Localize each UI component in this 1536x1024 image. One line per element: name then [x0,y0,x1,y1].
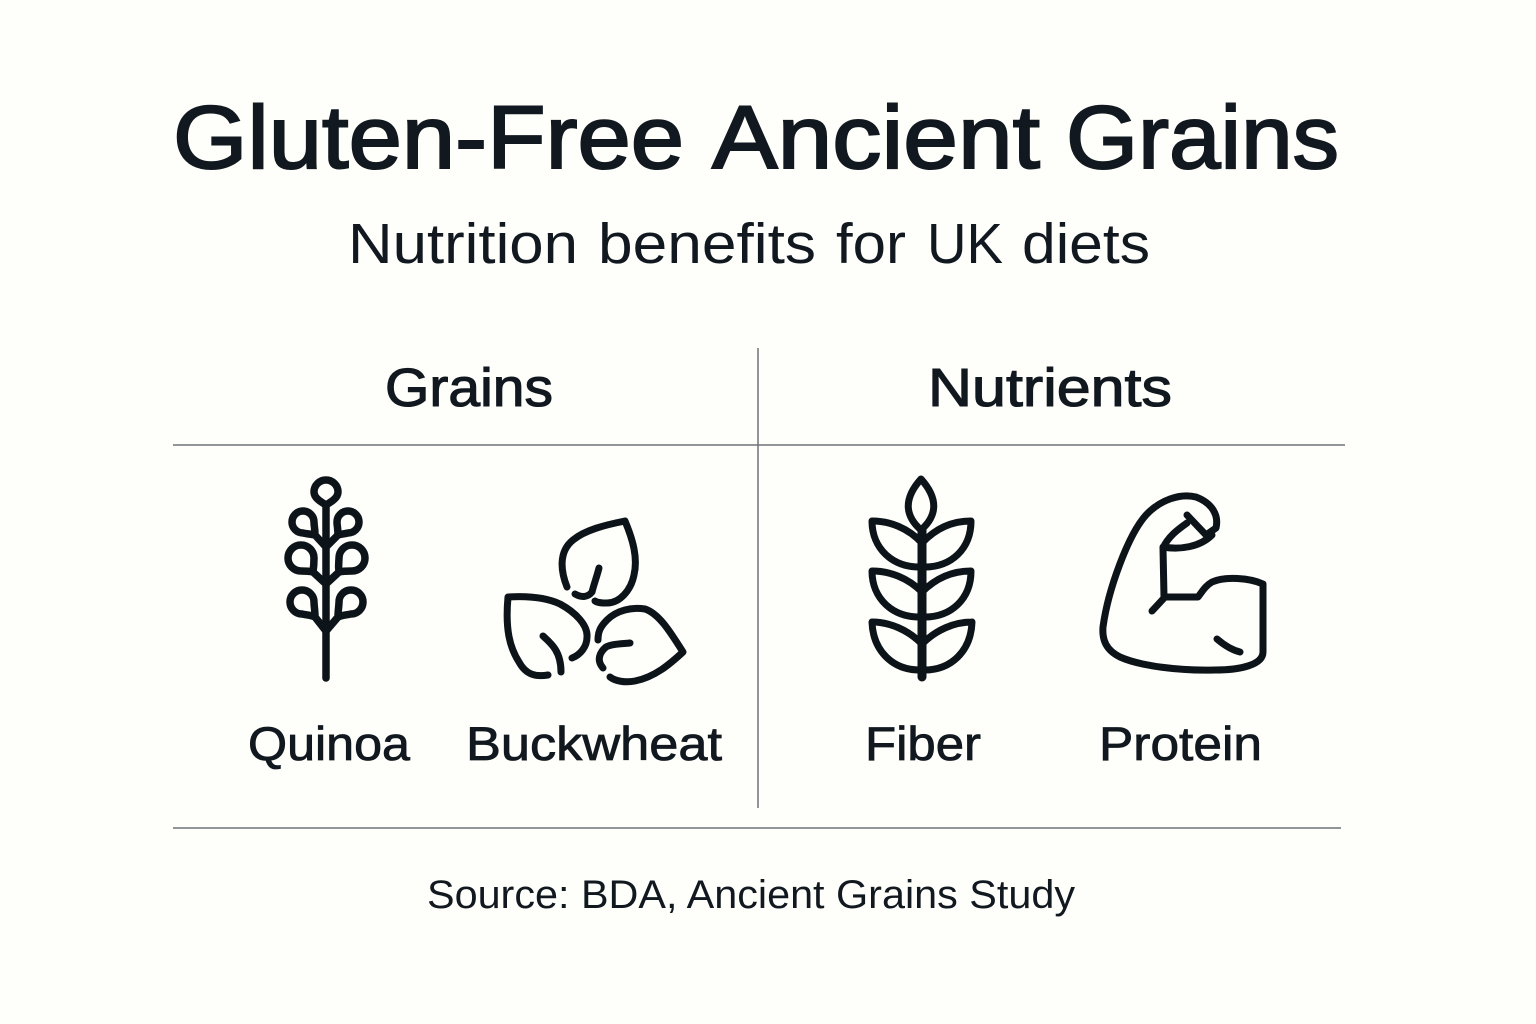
icon: buckwheat [507,521,683,682]
label: Fiber: Fiber [865,717,981,770]
title [173,87,1339,187]
label: Quinoa: Quinoa [248,717,411,770]
source note: Source: BDA, Ancient Grains Study [427,873,1075,917]
subtitle: Nutrition [348,212,578,276]
title: Ancient [712,87,1040,187]
title: Grains [1066,87,1339,187]
subtitle: benefits [598,212,816,276]
subtitle: for [836,212,906,276]
icon: quinoa [288,480,365,678]
label: Protein: Protein [1099,717,1262,770]
title: Gluten-Free [173,87,684,187]
heading: Nutrients: Nutrients [928,358,1172,418]
subtitle: UK [927,212,1003,276]
icon: protein [1103,496,1263,670]
label: Buckwheat: Buckwheat [466,717,722,770]
heading: Grains: Grains [385,358,553,418]
icon: fiber [872,479,972,677]
subtitle [348,212,1150,276]
subtitle: diets [1022,212,1150,276]
